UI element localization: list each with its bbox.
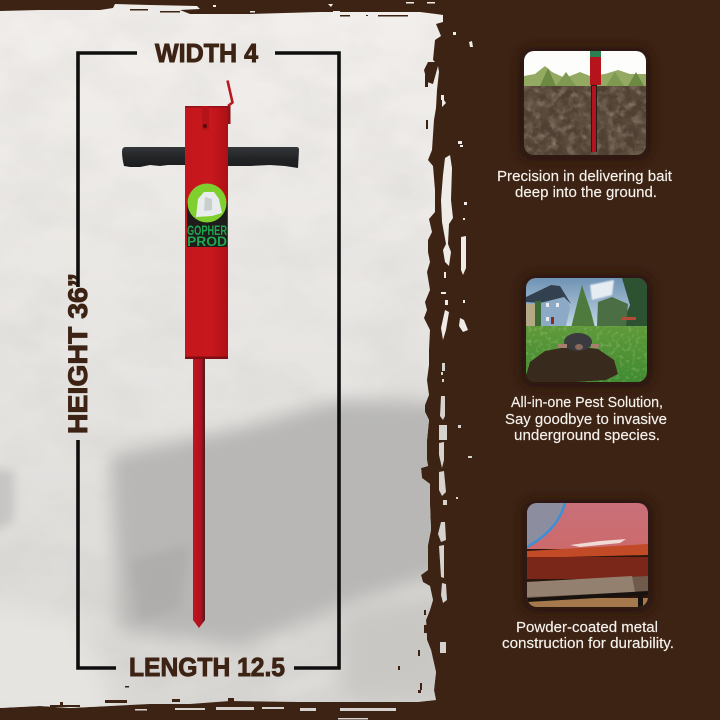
logo sticker: GOPHER: [187, 223, 227, 238]
caption: construction for durability.: [502, 635, 674, 652]
handle: [122, 147, 299, 168]
caption: All-in-one Pest Solution,: [511, 394, 663, 411]
caption: underground species.: [514, 427, 660, 444]
dimension frame: [78, 53, 339, 668]
caption: Precision in delivering bait: [497, 168, 673, 185]
photo: mole on molehill: [520, 274, 653, 388]
caption: deep into the ground.: [515, 184, 657, 201]
steel spike: [193, 359, 205, 628]
photo: coated metal closeup: [521, 499, 654, 613]
specks on paper edges: [50, 9, 428, 707]
heading: length: LENGTH 12.5: [129, 654, 285, 682]
light chips outside the torn edge: [213, 2, 473, 340]
photo: tool in soil: [518, 47, 652, 161]
logo sticker: [187, 184, 227, 249]
red box body: [185, 106, 228, 359]
caption: Say goodbye to invasive: [505, 411, 667, 428]
panel: concrete paper texture: [0, 0, 473, 720]
caption: [505, 394, 667, 444]
caption: [497, 168, 673, 201]
logo sticker: PROD: [187, 234, 227, 249]
heading: height: HEIGHT 36”: [63, 273, 93, 434]
panel: powder coated metal: [502, 499, 674, 652]
caption: [502, 619, 674, 652]
heading: width: WIDTH 4: [155, 40, 259, 68]
hook latch: [226, 80, 232, 124]
panel: mole pest solution: [505, 274, 667, 444]
panel: precision in soil: [497, 47, 673, 201]
product: gopher prod tool: [122, 80, 299, 628]
caption: Powder-coated metal: [516, 619, 658, 636]
